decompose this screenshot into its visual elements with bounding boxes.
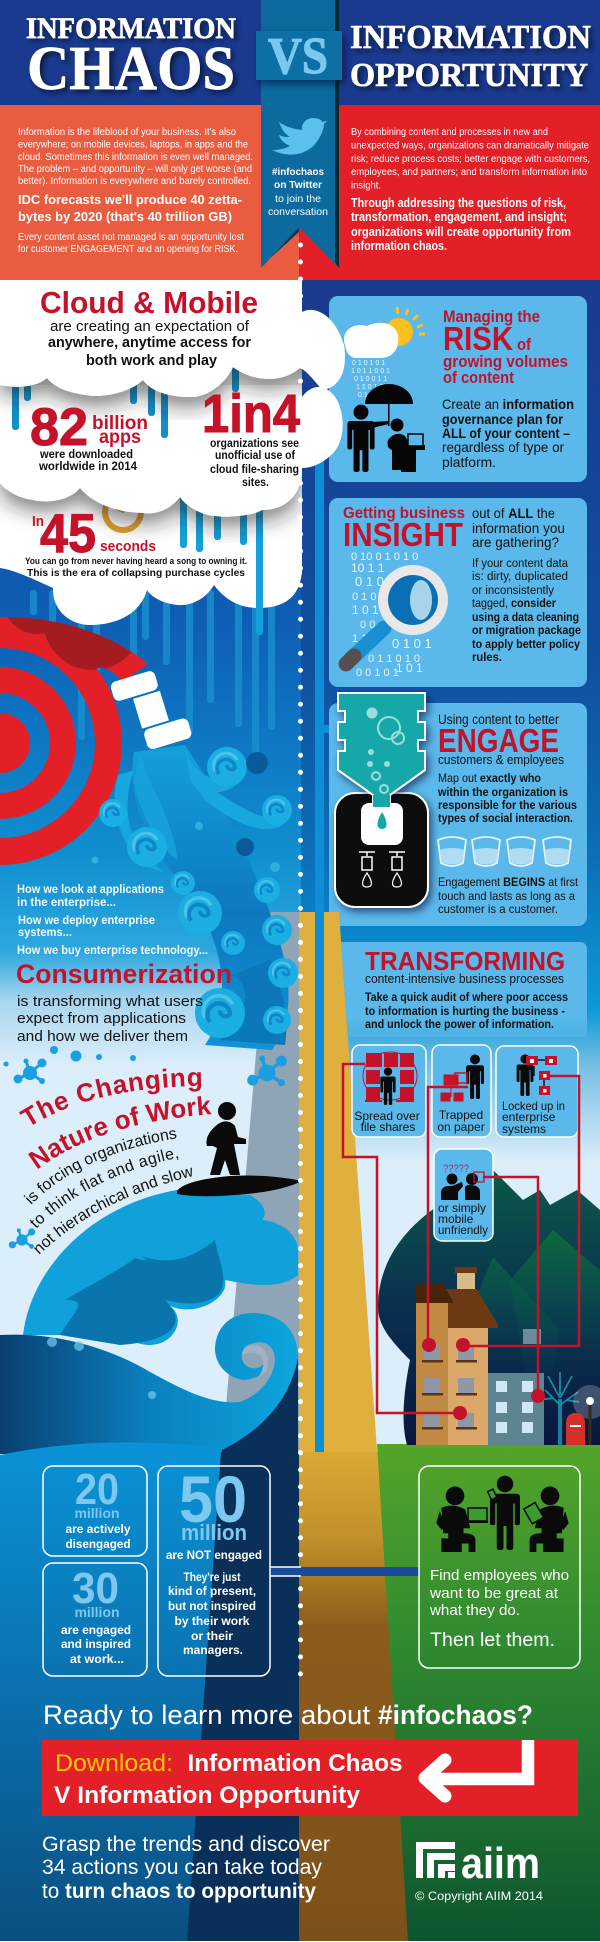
icon: locks and person — [517, 1054, 557, 1096]
stat box: 50 million: by their work — [174, 1614, 250, 1628]
text: consumerization body: is transforming what users — [17, 993, 203, 1010]
intro text right: employees, and partners; and transform information into — [351, 167, 587, 178]
icon: water cooler — [335, 693, 428, 907]
insight subhead: out of ALL the — [472, 505, 555, 521]
intro text right: risk; reduce process costs; better engage with customers, — [351, 154, 590, 165]
stat box: 30 million — [43, 1563, 147, 1676]
left intro panel — [0, 105, 299, 280]
insight heading: INSIGHT — [343, 516, 463, 553]
icon: binary rain: 0 1 0 1 — [358, 392, 380, 399]
engage heading: ENGAGE — [438, 722, 559, 759]
stat: in 45 seconds — [25, 502, 247, 579]
label: locked up: enterprise — [502, 1110, 556, 1124]
icon: twitter bird — [272, 118, 327, 155]
label: question marks: ????? — [443, 1163, 469, 1175]
twitter text — [268, 166, 328, 218]
bottom gold road — [299, 1452, 411, 1942]
banner: download: Download: — [55, 1750, 173, 1777]
icon: binary data: 10 1 1 — [351, 561, 385, 575]
right intro panel — [299, 105, 600, 280]
icon: mobile users — [441, 1172, 484, 1200]
engage footer — [438, 875, 579, 916]
insight body: is: dirty, duplicated — [472, 571, 568, 583]
heading: ready to learn more: Ready to learn more about — [43, 1700, 370, 1730]
risk heading: of — [517, 335, 531, 354]
label: locked up: Locked up in — [502, 1099, 565, 1113]
risk heading: Managing the — [443, 307, 540, 326]
logo: aiim: © Copyright AIIM 2014 — [415, 1891, 544, 1903]
text: changing nature body — [24, 1130, 192, 1254]
logo mark — [416, 1842, 455, 1878]
icon: binary data: 1 0 1 — [396, 661, 423, 675]
ribbon — [256, 0, 342, 268]
intro text left: for customer ENGAGEMENT and an opening for RISK. — [18, 244, 238, 255]
transforming body — [365, 992, 568, 1031]
front wave — [0, 1313, 298, 1460]
transforming body: Take a quick audit of where poor access — [365, 992, 568, 1004]
intro text left: IDC forecasts we'll produce 40 zetta- — [18, 192, 242, 207]
grey building — [488, 1329, 544, 1445]
stat box: 20 million: 20 — [75, 1465, 119, 1514]
engage body: responsible for the various — [438, 798, 577, 812]
twitter text: to join the — [275, 193, 321, 205]
insight body: using a data cleaning — [472, 612, 579, 624]
text: cloud intro: anywhere, anytime access for — [48, 334, 251, 351]
transforming subhead: content-intensive business processes — [365, 972, 564, 986]
stat: 82 billion apps: were downloaded — [39, 449, 133, 461]
cloud top — [0, 280, 345, 397]
risk body: platform. — [442, 454, 496, 470]
text: find employees: want to be great at — [429, 1585, 559, 1602]
brown building — [416, 1267, 498, 1445]
icon: glasses — [438, 837, 571, 866]
stat: in 45 seconds: This is the era of collapsing purchase cycles — [27, 567, 245, 579]
surfer — [177, 1102, 302, 1196]
label: locked up — [502, 1099, 565, 1136]
navy road — [187, 1452, 299, 1942]
stripes: top — [12, 362, 239, 438]
stat box: 30 million: 30 — [72, 1564, 119, 1613]
stat: in 45 seconds: You can go from never having heard a song to owning it. — [25, 556, 247, 566]
engage heading: customers & employees — [438, 752, 564, 767]
icon: three people — [436, 1476, 569, 1552]
cloud base — [0, 280, 302, 625]
label: trapped — [437, 1108, 485, 1134]
header band left — [0, 0, 300, 105]
stat: 1 in 4: unofficial use of — [215, 450, 295, 462]
connector between 50 million and employees — [270, 1567, 419, 1576]
text: how we look: in the enterprise... — [17, 897, 116, 909]
stat box: 30 million: and inspired — [61, 1637, 131, 1651]
stat: 82 billion apps — [30, 398, 148, 473]
insight body: to apply better policy — [472, 639, 581, 651]
stat box: 30 million: are engaged — [61, 1623, 131, 1637]
stat: 82 billion apps: billion — [92, 413, 148, 434]
risk body: Create an information — [442, 396, 574, 412]
stat: 82 billion apps: worldwide in 2014 — [38, 461, 138, 473]
stripes: middle — [180, 490, 263, 635]
panel: insight — [329, 498, 587, 687]
intro text left: The problem – and opportunity – will only get worse (and — [18, 164, 252, 175]
insight body: or migration package — [472, 625, 581, 637]
icon: binary rain: 1 0 1 1 0 0 1 — [351, 368, 390, 375]
banner: download — [42, 1740, 578, 1816]
insight subhead — [472, 505, 565, 550]
stat: 82 billion apps: apps — [99, 427, 141, 448]
logo: aiim: aiim — [461, 1839, 540, 1888]
title left: INFORMATION — [26, 12, 236, 45]
risk body: regardless of type or — [442, 439, 564, 455]
stat box: 50 million: million — [181, 1520, 247, 1545]
panel: risk — [329, 296, 587, 482]
blue vertical strip — [222, 450, 340, 1460]
text: find employees — [429, 1567, 569, 1651]
engage heading — [438, 712, 564, 767]
insight body: If your content data — [472, 558, 569, 570]
intro text left: cloud. Sometimes this information is even well managed. — [18, 152, 253, 163]
text: find employees: Then let them. — [430, 1630, 555, 1651]
molecules — [4, 1046, 287, 1249]
stat: 1 in 4: 1in4 — [202, 384, 300, 444]
insight subhead: information you — [472, 520, 565, 536]
hose — [0, 617, 148, 682]
title right: INFORMATION — [350, 19, 591, 56]
stat box: 50 million: 50 — [179, 1462, 247, 1536]
text: grasp the trends: 34 actions you can take today — [42, 1856, 322, 1879]
wave shadow — [60, 1240, 223, 1345]
hose shadow — [8, 617, 132, 670]
text: how we look: How we deploy enterprise — [18, 915, 155, 927]
text: cloud intro: both work and play — [86, 352, 218, 369]
mountains and town — [378, 1170, 600, 1445]
intro text left: better). Information is everywhere and barely controlled. — [18, 176, 251, 187]
vs band — [256, 31, 342, 80]
icon: binary data: 1 0 1 — [352, 603, 379, 617]
navy wedge — [222, 1358, 298, 1452]
intro text left — [18, 127, 253, 255]
icon: binary rain: 0 1 0 1 0 1 — [352, 360, 385, 367]
icon: return arrow — [425, 1740, 528, 1796]
intro text left: Information is the lifeblood of your business. It's also — [18, 127, 236, 138]
heading: consumerization: Consumerization — [16, 959, 232, 989]
label: mobile — [438, 1201, 488, 1237]
bottom left background — [0, 1458, 299, 1942]
heading: ready to learn more: #infochaos? — [378, 1700, 533, 1730]
stat: 1 in 4: cloud file-sharing — [210, 464, 299, 476]
label: mobile: or simply — [438, 1201, 486, 1215]
risk body: ALL of your content – — [442, 425, 570, 441]
vertical dotted line — [298, 245, 303, 1675]
label: trapped: Trapped — [439, 1108, 483, 1122]
header band right — [300, 0, 600, 105]
insight body: or inconsistently — [472, 585, 554, 597]
engage footer: touch and lasts as long as a — [438, 889, 575, 903]
label: mobile: mobile — [438, 1212, 474, 1226]
text: consumerization body: expect from applications — [17, 1010, 186, 1027]
text: how we look — [17, 884, 208, 957]
postbox — [566, 1413, 585, 1445]
long water stripes — [30, 590, 275, 755]
insight body: tagged, consider — [472, 598, 556, 610]
road: gold section — [324, 912, 377, 1460]
street lamp — [573, 1385, 600, 1445]
stat box: 50 million — [158, 1462, 270, 1676]
tree — [540, 1372, 579, 1445]
intro text right: unexpected ways, organizations can dramatically mitigate — [351, 140, 589, 152]
stat box: 50 million: are NOT engaged — [166, 1548, 262, 1562]
icon: binary data: 0 1 1 0 1 0 — [368, 653, 420, 665]
risk body — [442, 396, 574, 470]
cloud lobe right — [300, 387, 343, 468]
heading: the changing nature of work: The Changing — [19, 1068, 202, 1125]
text: grasp the trends — [42, 1833, 330, 1903]
stat box: 30 million: at work... — [70, 1652, 124, 1666]
box: locked up — [496, 1046, 578, 1137]
background: right sky — [301, 270, 600, 1460]
box: spread over file shares — [352, 1045, 426, 1137]
engage footer: Engagement BEGINS at first — [438, 875, 579, 889]
text: consumerization body: and how we deliver them — [17, 1028, 188, 1045]
risk heading — [443, 307, 568, 387]
icon: filing boxes — [363, 1052, 417, 1105]
intro text right: By combining content and processes in new and — [351, 127, 548, 138]
stat box: 50 million: but not inspired — [168, 1599, 256, 1613]
stat box: 20 million: million — [74, 1505, 120, 1521]
icon: binary data: 0 1 0 1 — [392, 636, 432, 651]
stat: in 45 seconds: 45 — [40, 502, 96, 564]
heading: the changing nature of work: Nature of Work — [28, 1096, 212, 1169]
text: changing nature body: is forcing organizations — [24, 1130, 176, 1204]
stat box: 50 million: or their — [191, 1629, 233, 1643]
panel: engage — [324, 693, 587, 926]
twitter text: on Twitter — [274, 179, 322, 191]
label: mobile: unfriendly — [438, 1223, 488, 1237]
label: trapped: on paper — [437, 1120, 485, 1134]
label: spread over: file shares — [361, 1120, 415, 1134]
icon: binary data: 0 10 0 1 0 1 0 — [351, 551, 418, 563]
twitter text: #infochaos — [272, 166, 324, 178]
icon: binary data: 0 0 — [360, 619, 375, 631]
bottom edge — [0, 1941, 600, 1942]
risk heading: RISK — [443, 320, 513, 357]
icon: magnifier — [346, 565, 448, 664]
stat: 1 in 4 — [202, 384, 300, 489]
text: grasp the trends: Grasp the trends and discover — [42, 1833, 330, 1856]
panel: find employees — [419, 1466, 580, 1668]
cloud middle — [0, 385, 302, 517]
text: cloud intro — [48, 318, 251, 369]
label: spread over: Spread over — [354, 1109, 420, 1123]
risk heading: growing volumes — [443, 352, 568, 371]
text: find employees: what they do. — [429, 1602, 520, 1619]
icon: binary rain: 0 1 0 0 1 1 — [354, 376, 387, 383]
intro text left: Every content asset not managed is an opportunity lost — [18, 232, 244, 243]
engage body: within the organization is — [437, 785, 568, 799]
icon: sun — [385, 307, 425, 346]
icon: binary rain: 1 1 0 1 0 — [356, 384, 383, 391]
hose connector — [109, 664, 193, 756]
icon: binary rain — [351, 360, 390, 399]
icon: binary data: 0 0 1 0 1 — [356, 667, 399, 679]
banner: download: Information Chaos — [188, 1750, 402, 1777]
stat: 82 billion apps: 82 — [30, 398, 88, 457]
stat box: 20 million — [43, 1465, 147, 1556]
intro text left: everywhere; on mobile devices, laptops, in apps and the — [18, 140, 248, 150]
text: how we look: How we buy enterprise technology... — [17, 945, 208, 957]
transforming body: to information is hurting the business - — [365, 1006, 565, 1018]
text: how we look: systems... — [18, 927, 72, 939]
insight subhead: are gathering? — [472, 534, 559, 550]
transforming heading: TRANSFORMING — [365, 946, 565, 976]
intro text right — [351, 127, 590, 253]
back wave — [23, 1190, 298, 1345]
icon: umbrella and people — [347, 384, 425, 472]
background: left sky — [0, 270, 301, 1460]
stat box: 50 million: They're just — [184, 1570, 241, 1584]
intro text right: organizations will create opportunity from — [351, 225, 571, 239]
risk heading: of content — [443, 368, 514, 387]
road overlap on engage panel — [324, 912, 340, 926]
title right: OPPORTUNITY — [350, 57, 588, 94]
stat: 1 in 4: organizations see — [210, 438, 299, 450]
stat: in 45 seconds: In — [32, 513, 44, 530]
text: consumerization body — [17, 993, 203, 1045]
text: how we look: How we look at applications — [17, 884, 164, 896]
stat: 1 in 4: sites. — [242, 477, 269, 489]
engage body: types of social interaction. — [438, 811, 573, 825]
engage body — [437, 771, 577, 825]
road: yellow strip — [299, 912, 315, 1454]
engage body: Map out exactly who — [438, 771, 541, 785]
engage footer: customer is a customer. — [438, 902, 558, 916]
engage heading: Using content to better — [438, 712, 559, 727]
text: find employees: Find employees who — [430, 1567, 569, 1584]
icon: clock — [105, 494, 141, 530]
banner: download: V Information Opportunity — [54, 1782, 361, 1809]
risk body: governance plan for — [442, 411, 563, 427]
connector lines and dots — [343, 1064, 579, 1420]
intro text right: insight. — [351, 180, 381, 192]
bottom right green — [377, 1444, 600, 1942]
box: trapped on paper — [432, 1045, 491, 1137]
label: spread over — [354, 1109, 420, 1134]
box: mobile unfriendly — [434, 1149, 493, 1241]
cloud top shadow — [0, 367, 302, 420]
icon: binary data: 0 1 0 — [352, 591, 376, 603]
intro text right: Through addressing the questions of risk, — [351, 196, 566, 210]
heading: cloud and mobile: Cloud & Mobile — [40, 285, 258, 320]
stat box: 20 million: are actively — [66, 1522, 131, 1536]
stat box: 50 million: kind of present, — [168, 1584, 256, 1598]
wave foot — [0, 1442, 222, 1460]
vs text: VS — [268, 28, 328, 85]
stat box: 50 million: managers. — [183, 1643, 243, 1657]
title left: CHAOS — [27, 35, 235, 103]
panel: transforming — [341, 942, 587, 1037]
water jet — [92, 745, 298, 1050]
icon: binary data — [351, 551, 432, 679]
stat: in 45 seconds: seconds — [100, 538, 156, 555]
title right — [350, 19, 591, 94]
text: cloud intro: are creating an expectation of — [50, 318, 250, 335]
small cloud — [344, 323, 398, 358]
insight body — [472, 558, 581, 664]
text: changing nature body: not hierarchical and slow — [34, 1168, 192, 1254]
icon: paper and person — [441, 1054, 484, 1101]
insight heading: Getting business — [343, 505, 465, 522]
twitter text: conversation — [268, 206, 328, 218]
stat box: 20 million: disengaged — [66, 1537, 130, 1551]
intro text left: bytes by 2020 (that's 40 trillion GB) — [18, 209, 232, 224]
icon: binary data: 1 1 0 — [352, 633, 376, 645]
road: grey section — [222, 912, 299, 1454]
heading: ready to learn more — [43, 1700, 533, 1730]
text: grasp the trends: to turn chaos to opportunity — [42, 1880, 316, 1903]
logo: aiim — [415, 1839, 544, 1903]
transforming body: and unlock the power of information. — [365, 1019, 554, 1031]
insight body: rules. — [472, 652, 502, 664]
stat box: 30 million: million — [74, 1604, 120, 1620]
intro text right: transformation, engagement, and insight; — [351, 210, 567, 224]
label: locked up: systems — [502, 1122, 546, 1136]
text: changing nature body: to think flat and agile, — [30, 1150, 178, 1228]
hose target rings — [0, 634, 108, 852]
intro text right: information chaos. — [351, 239, 447, 253]
icon: binary data: 0 1 0 — [355, 574, 384, 589]
